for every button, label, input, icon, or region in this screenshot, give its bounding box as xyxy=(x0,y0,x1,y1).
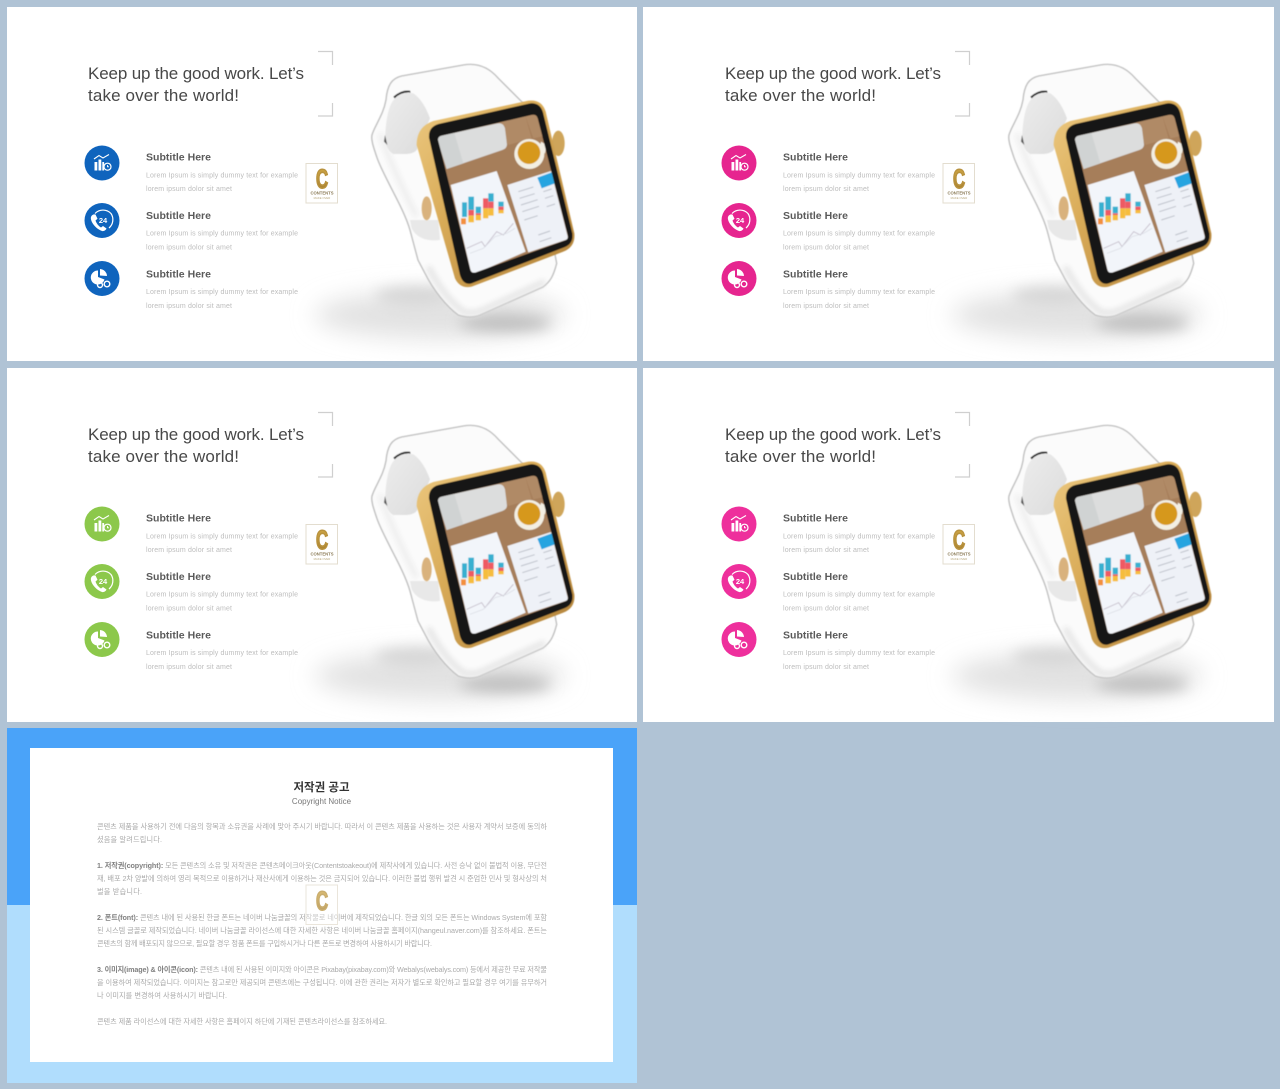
logo watermark: C xyxy=(953,164,965,194)
title: Keep up the good work. Let’s xyxy=(725,64,941,83)
item 2 xyxy=(722,203,935,251)
item 2: Lorem Ipsum is simply dummy text for example xyxy=(783,592,935,599)
item 1: Lorem Ipsum is simply dummy text for example xyxy=(783,172,935,180)
item 2: 24 xyxy=(736,577,745,586)
notice body text: 재, 배포 2차 양발에 의하여 영리 목적으로 이용하거나 재산사에게 이용하는 것은 금지되어 있습니다. 이러한 불법 행위 발견 시 준엄한 민사 및 형사상의 처 xyxy=(97,874,547,883)
logo watermark xyxy=(943,524,974,564)
item 1: Lorem Ipsum is simply dummy text for example xyxy=(783,534,935,540)
logo watermark: CONTENTS xyxy=(947,190,971,196)
notice body text: 벌을 받습니다. xyxy=(97,887,142,896)
title xyxy=(725,425,941,466)
item 1: Lorem Ipsum is simply dummy text for example xyxy=(146,172,298,180)
item 2: Subtitle Here xyxy=(783,210,848,222)
item 3 xyxy=(84,622,298,671)
item 3: Lorem Ipsum is simply dummy text for example xyxy=(146,650,298,657)
item 3: Lorem Ipsum is simply dummy text for example xyxy=(783,289,935,296)
title xyxy=(88,64,304,105)
corner brackets xyxy=(955,52,970,116)
item 3: Subtitle Here xyxy=(146,629,211,641)
item 2: lorem ipsum dolor sit amet xyxy=(783,244,869,251)
item 1 xyxy=(84,506,298,554)
notice heading: Copyright Notice xyxy=(292,797,352,806)
item 2: Lorem Ipsum is simply dummy text for example xyxy=(783,231,935,238)
item 1: Lorem Ipsum is simply dummy text for example xyxy=(146,534,298,540)
notice body text: 콘텐츠의 함께 배포되지 않으므로, 필요할 경우 정품 폰트를 구입하시거나 다른 폰트로 변경하여 사용하시기 바랍니다. xyxy=(97,939,432,948)
panel: blue slide xyxy=(7,7,637,361)
item 2: lorem ipsum dolor sit amet xyxy=(146,605,232,612)
item 2: Lorem Ipsum is simply dummy text for example xyxy=(146,231,298,238)
item 2: Lorem Ipsum is simply dummy text for example xyxy=(146,592,298,599)
logo watermark: C xyxy=(316,886,328,916)
logo watermark: MAKE OVER xyxy=(314,557,330,561)
item 3: lorem ipsum dolor sit amet xyxy=(146,303,232,310)
item 1: lorem ipsum dolor sit amet xyxy=(783,186,869,193)
logo watermark: CONTENTS xyxy=(310,190,334,196)
logo watermark: C xyxy=(316,164,328,194)
logo watermark: MAKE OVER xyxy=(951,557,967,561)
item 3: Subtitle Here xyxy=(783,268,848,280)
notice body text: 3. 이미지(image) & 아이콘(icon): 콘텐츠 내에 된 사용된 이미지와 아이콘은 Pixabay(pixabay.com)와 Webalys(webalys.com) 등에서 제공한 무료 저작물 xyxy=(97,965,547,974)
watch illustration xyxy=(315,425,575,700)
item 2 xyxy=(84,564,298,612)
item 2: lorem ipsum dolor sit amet xyxy=(146,244,232,251)
title: Keep up the good work. Let’s xyxy=(88,425,304,444)
logo watermark: CONTENTS xyxy=(947,552,971,556)
logo watermark: MAKE OVER xyxy=(314,196,330,200)
corner brackets xyxy=(955,412,970,477)
logo watermark: C xyxy=(953,525,965,555)
notice body text: 1. 저작권(copyright): 모든 콘텐츠의 소유 및 저작권은 콘텐츠메이크아웃(Contentstoakeout)에 제작사에게 있습니다. 사전 승낙 없이 불법적 이용, 무단전 xyxy=(97,861,547,870)
logo watermark: C xyxy=(316,525,328,555)
title xyxy=(725,64,941,105)
title xyxy=(88,425,304,466)
notice body text: 나 이미지를 변경하여 사용하시기 바랍니다. xyxy=(97,991,227,1000)
item 2: Subtitle Here xyxy=(783,571,848,583)
title: Keep up the good work. Let’s xyxy=(88,64,304,83)
item 1: lorem ipsum dolor sit amet xyxy=(146,186,232,193)
item 1: Subtitle Here xyxy=(146,152,211,164)
title: Keep up the good work. Let’s xyxy=(725,425,941,444)
panel: magenta slide xyxy=(643,368,1274,722)
item 3 xyxy=(722,622,935,671)
item 3: lorem ipsum dolor sit amet xyxy=(146,664,232,671)
logo watermark xyxy=(306,524,338,564)
watch illustration xyxy=(315,64,575,339)
logo watermark: CONTENTS xyxy=(310,552,334,556)
item 1 xyxy=(722,146,935,193)
title: take over the world! xyxy=(725,447,876,466)
corner brackets xyxy=(318,412,332,477)
item 3 xyxy=(722,261,935,310)
item 2: Subtitle Here xyxy=(146,210,211,222)
notice body text: 콘텐츠 제품을 사용하기 전에 다음의 항목과 소유권을 사례에 맞아 주시기 바랍니다. 따라서 이 콘텐츠 제품을 사용하는 것은 사용자 계약서 보증에 동의하 xyxy=(97,822,547,831)
item 2 xyxy=(84,203,298,251)
notice body text: 된 시스템 글꼴로 제작되었습니다. 네이버 나눔글꼴 라이선스에 대한 자세한 사항은 네이버 나눔글꼴 홈페이지(hangeul.naver.com)를 참조하세요. 폰트는 xyxy=(97,926,547,935)
panel: copyright notice xyxy=(7,728,637,1083)
item 1: Subtitle Here xyxy=(783,152,848,164)
notice body text: 셨음을 알려드립니다. xyxy=(97,835,162,844)
item 2: 24 xyxy=(99,577,108,586)
corner brackets xyxy=(318,52,332,116)
item 1 xyxy=(722,506,935,554)
item 2: lorem ipsum dolor sit amet xyxy=(783,605,869,612)
logo watermark xyxy=(306,164,338,203)
item 2: 24 xyxy=(99,216,108,225)
title: take over the world! xyxy=(725,86,876,105)
item 3: Lorem Ipsum is simply dummy text for example xyxy=(146,289,298,296)
logo watermark: MAKE OVER xyxy=(951,196,967,200)
item 3: Subtitle Here xyxy=(783,629,848,641)
title: take over the world! xyxy=(88,447,239,466)
item 1: lorem ipsum dolor sit amet xyxy=(783,547,869,554)
notice body text: 콘텐츠 제품 라이선스에 대한 자세한 사항은 홈페이지 하단에 기재된 콘텐츠라이선스를 참조하세요. xyxy=(97,1017,387,1026)
item 2: 24 xyxy=(736,216,745,225)
item 2: Subtitle Here xyxy=(146,571,211,583)
watch illustration xyxy=(952,64,1212,339)
item 1: Subtitle Here xyxy=(783,512,848,524)
title: take over the world! xyxy=(88,86,239,105)
item 2 xyxy=(722,564,935,612)
panel: green slide xyxy=(7,368,637,722)
logo watermark xyxy=(306,885,338,924)
notice body text: 2. 폰트(font): 콘텐츠 내에 된 사용된 한글 폰트는 네이버 나눔글꼴의 저작물로 네이버에 제작되었습니다. 한글 외의 모든 폰트는 Windows System에 포함 xyxy=(97,913,547,922)
item 3 xyxy=(84,261,298,310)
item 3: Lorem Ipsum is simply dummy text for example xyxy=(783,650,935,657)
item 1: Subtitle Here xyxy=(146,512,211,524)
notice body text: 을 이용하여 제작되었습니다. 이미지는 참고로만 제공되며 콘텐츠에는 구성됩니다. 이에 관한 권리는 저자가 별도로 확인하고 필요할 경우 여기를 유무하거 xyxy=(97,978,547,987)
item 3: lorem ipsum dolor sit amet xyxy=(783,664,869,671)
item 1: lorem ipsum dolor sit amet xyxy=(146,547,232,554)
item 1 xyxy=(84,146,298,193)
item 3: Subtitle Here xyxy=(146,268,211,280)
notice heading xyxy=(292,780,352,806)
notice heading: 저작권 공고 xyxy=(293,780,350,794)
watch illustration xyxy=(952,425,1212,700)
logo watermark xyxy=(943,164,974,203)
item 3: lorem ipsum dolor sit amet xyxy=(783,303,869,310)
panel: pink slide xyxy=(643,7,1274,361)
notice body text xyxy=(97,822,547,1026)
